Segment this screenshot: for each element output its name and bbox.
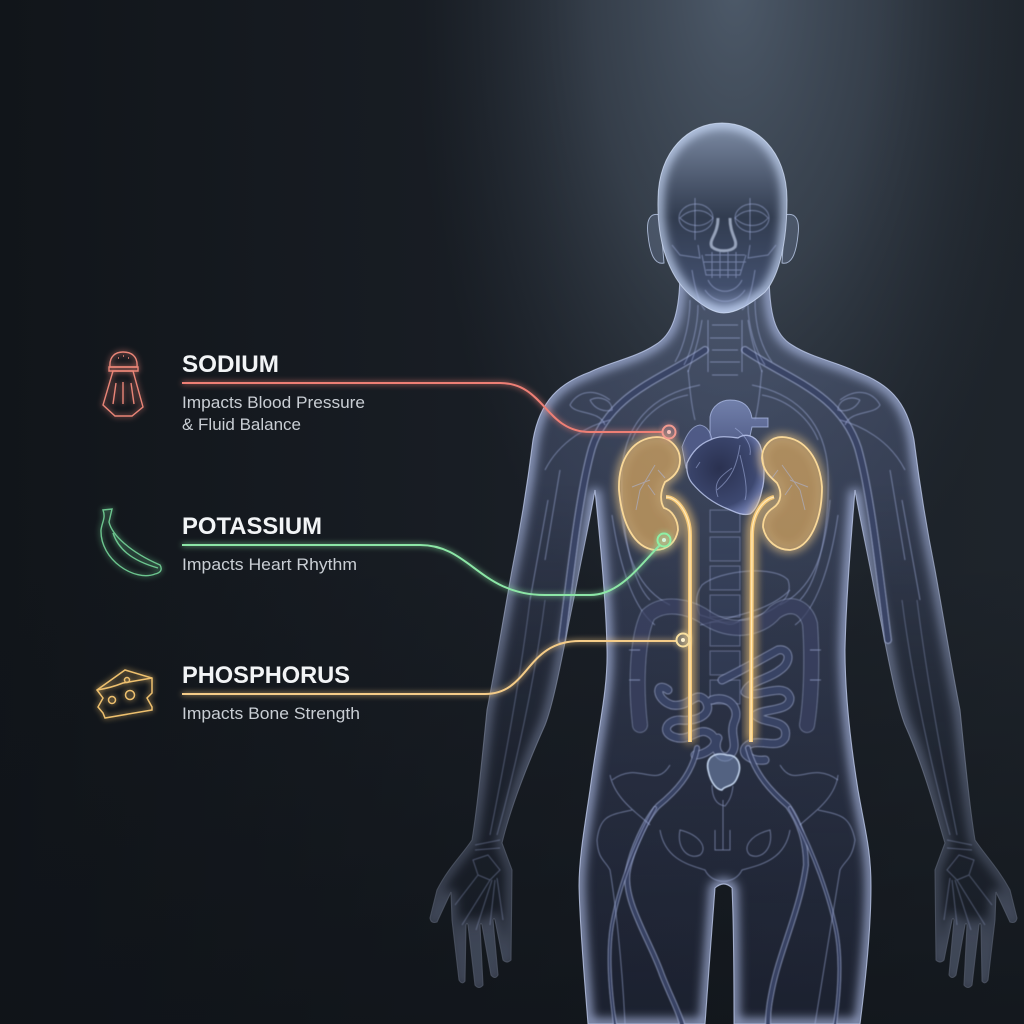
kidneys and ureters [619, 437, 822, 742]
rib cage and vessels [530, 350, 920, 640]
body silhouette [430, 270, 1017, 1024]
heading: phosphorus: PHOSPHORUS [182, 662, 350, 689]
description: phosphorus: Impacts Bone Strength [182, 704, 360, 723]
head [648, 123, 798, 365]
facial structure [672, 198, 776, 310]
heading: potassium: POTASSIUM [182, 513, 322, 540]
liver and stomach [696, 571, 790, 625]
connector line: phosphorus [182, 641, 676, 694]
callout: potassium [101, 509, 671, 595]
marker: potassium [658, 534, 670, 546]
large and small intestine [612, 606, 838, 780]
right kidney [762, 437, 822, 550]
left atrium [682, 425, 712, 470]
callout: sodium [103, 351, 676, 438]
arm and hand bones [455, 600, 992, 930]
kidney veins [632, 465, 808, 510]
left kidney [619, 437, 680, 550]
description: potassium: Impacts Heart Rhythm [182, 555, 357, 574]
ventricles [687, 435, 764, 515]
ears [648, 214, 798, 263]
spine [688, 320, 762, 704]
great vessels [710, 400, 768, 445]
icon: banana [101, 509, 161, 576]
heading: sodium: SODIUM [182, 351, 279, 378]
bladder [708, 754, 740, 790]
marker: phosphorus [676, 634, 690, 646]
translucent human body [430, 123, 1017, 1024]
callout: phosphorus [97, 634, 690, 723]
right ureter [751, 497, 774, 742]
icon: salt shaker [103, 352, 143, 416]
heart [682, 400, 768, 515]
icon: cheese [97, 670, 152, 718]
left ureter [666, 497, 690, 742]
connector line: sodium [182, 383, 662, 432]
description: sodium [182, 393, 365, 434]
connector line: potassium [182, 545, 660, 595]
neck structure [675, 300, 772, 365]
description: sodium: & Fluid Balance [182, 415, 301, 434]
pelvis, bladder and leg vessels [597, 748, 855, 1024]
marker: sodium [662, 426, 676, 438]
description: sodium: Impacts Blood Pressure [182, 393, 365, 412]
